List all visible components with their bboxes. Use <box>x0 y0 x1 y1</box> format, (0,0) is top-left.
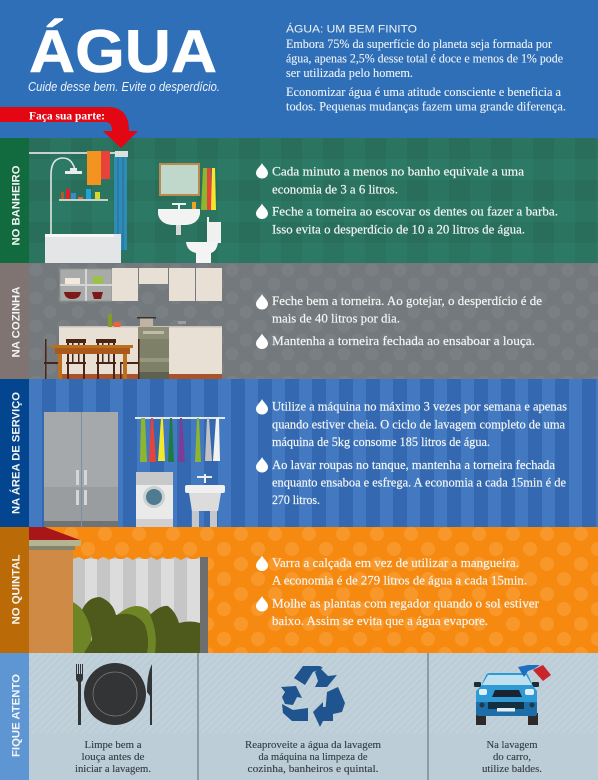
title: ÁGUA <box>29 18 217 85</box>
intro text: ÁGUA: UM BEM FINITO <box>286 23 417 36</box>
intro text <box>286 23 566 114</box>
illustration: kitchen <box>44 268 222 379</box>
bullet text: serviço: quando estiver cheia. O ciclo de lavagem completo de uma <box>272 418 565 432</box>
section label: no banheiro: NO BANHEIRO <box>10 165 22 246</box>
bullet text: cozinha: Mantenha a torneira fechada ao ensaboar a louça. <box>272 334 535 348</box>
arrow: faça sua parte: Faça sua parte: <box>29 110 105 122</box>
panel: no quintal <box>0 527 598 653</box>
icon: car and bucket <box>474 665 551 725</box>
bullet text: quintal: A economia é de 279 litros de água a cada 15min. <box>272 574 527 588</box>
caption: car: do carro, <box>493 752 531 763</box>
section label: na cozinha: NA COZINHA <box>10 286 22 358</box>
bullet text: serviço <box>256 399 567 507</box>
bullet text: banheiro: economia de 3 a 6 litros. <box>272 182 398 196</box>
caption: car: utilize baldes. <box>482 764 542 775</box>
panel: fique atento <box>0 653 598 780</box>
arrow: faça sua parte <box>0 107 138 148</box>
illustration: bathroom <box>29 151 221 263</box>
subtitle: Cuide desse bem. Evite o desperdício. <box>28 80 220 94</box>
section label: fique atento: FIQUE ATENTO <box>10 674 22 757</box>
intro text: todos. Pequenas mudanças fazem uma grande diferença. <box>286 100 566 114</box>
intro text: água, apenas 2,5% desse total é doce e menos de 1% pode <box>286 52 563 66</box>
bullet text: cozinha: Feche bem a torneira. Ao gotejar, o desperdício é de <box>272 294 542 308</box>
intro text: ser utilizada pelo homem. <box>286 66 413 80</box>
caption: recycle: cozinha, banheiros e quintal. <box>248 764 378 775</box>
section label: na área de serviço <box>0 379 29 527</box>
caption: plate <box>75 740 151 775</box>
section label: no quintal: NO QUINTAL <box>10 554 22 624</box>
panel: no banheiro <box>0 138 598 263</box>
bullet text: banheiro: Cada minuto a menos no banho equivale a uma <box>272 164 524 178</box>
bullet text: banheiro: Feche a torneira ao escovar os dentes ou fazer a barba. <box>272 204 558 218</box>
section label: no banheiro <box>0 138 29 263</box>
bullet text: banheiro: Isso evita o desperdício de 10 a 20 litros de água. <box>272 222 525 236</box>
icon: plate and cutlery <box>76 663 152 725</box>
section label: fique atento <box>0 653 29 780</box>
icon: recycle <box>281 666 345 727</box>
bullet text: cozinha <box>256 294 542 349</box>
intro text: Embora 75% da superfície do planeta seja formada por <box>286 37 552 51</box>
bullet text: serviço: Utilize a máquina no máximo 3 vezes por semana e apenas <box>272 400 567 414</box>
panel: na área de serviço <box>0 379 598 527</box>
caption: car <box>482 740 542 775</box>
caption: recycle: da máquina na limpeza de <box>258 752 368 763</box>
bullet text: serviço: Ao lavar roupas no tanque, mantenha a torneira fechada <box>272 458 555 472</box>
illustration: laundry <box>44 412 225 527</box>
bullet text: quintal: baixo. Assim se evita que a água evapore. <box>272 614 488 628</box>
bullet text: serviço: 270 litros. <box>272 493 320 507</box>
bullet text: banheiro <box>256 163 558 236</box>
bullet text: quintal: Molhe as plantas com regador quando o sol estiver <box>272 596 540 610</box>
caption: car: Na lavagem <box>486 740 538 751</box>
bullet text: cozinha: mais de 40 litros por dia. <box>272 312 400 326</box>
section label: no quintal <box>0 527 29 653</box>
intro text: Economizar água é uma atitude consciente e beneficia a <box>286 85 562 99</box>
section label: na área de serviço: NA ÁREA DE SERVIÇO <box>10 392 22 514</box>
bullet text: quintal <box>256 556 540 628</box>
panel: header <box>0 0 598 138</box>
caption: recycle: Reaproveite a água da lavagem <box>245 740 381 751</box>
caption: plate: louça antes de <box>82 752 145 763</box>
section label: na cozinha <box>0 263 29 379</box>
bullet text: serviço: enquanto ensaboa e esfrega. A economia a cada 15min é de <box>272 476 566 490</box>
bullet text: quintal: Varra a calçada em vez de utilizar a mangueira. <box>272 556 519 570</box>
illustration: yard <box>29 527 208 653</box>
bullet text: serviço: máquina de 5kg consome 185 litros de água. <box>272 435 490 449</box>
caption: recycle <box>245 740 381 775</box>
caption: plate: iniciar a lavagem. <box>75 764 151 775</box>
caption: plate: Limpe bem a <box>84 740 142 751</box>
panel: na cozinha <box>0 263 598 379</box>
